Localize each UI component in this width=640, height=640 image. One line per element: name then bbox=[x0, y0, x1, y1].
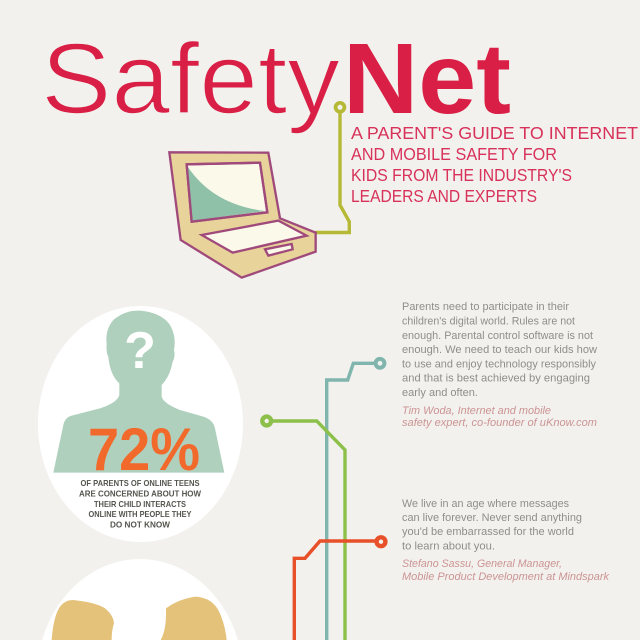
connector: teal line bbox=[327, 359, 384, 640]
panel: 72% statistic bbox=[38, 306, 243, 542]
subtitle bbox=[351, 123, 638, 206]
caption bbox=[79, 478, 201, 530]
title bbox=[41, 23, 511, 135]
text block: Tim Woda quote: Tim Woda, Internet and mobile bbox=[402, 405, 551, 417]
icon: laptop bbox=[169, 152, 316, 278]
text block: Stefano Sassu quote: Mobile Product Development at Mindspark bbox=[402, 571, 609, 583]
caption: ONLINE WITH PEOPLE THEY bbox=[88, 509, 192, 519]
text block: Stefano Sassu quote: to learn about you. bbox=[402, 540, 495, 552]
connector: green line bbox=[262, 417, 345, 640]
caption: THEIR CHILD INTERACTS bbox=[94, 499, 186, 509]
text block: Tim Woda quote bbox=[402, 301, 597, 429]
text block: Stefano Sassu quote bbox=[402, 498, 609, 583]
icon: silhouette with question mark bbox=[53, 311, 224, 473]
caption: DO NOT KNOW bbox=[110, 520, 170, 530]
caption: ARE CONCERNED ABOUT HOW bbox=[79, 488, 201, 498]
text block: Stefano Sassu quote: Stefano Sassu, General Manager, bbox=[402, 558, 562, 570]
text block: Tim Woda quote: to use and enjoy technology responsibly bbox=[402, 358, 596, 370]
text block: Tim Woda quote: enough. Parental control software is not bbox=[402, 330, 593, 342]
subtitle: A PARENT'S GUIDE TO INTERNET bbox=[351, 123, 638, 143]
text block: Tim Woda quote: enough. We need to teach our kids how bbox=[402, 344, 597, 356]
statistic: 72%: 72% bbox=[88, 416, 200, 483]
connector: laptop to title bbox=[315, 103, 349, 233]
text block: Tim Woda quote: children's digital world. Rules are not bbox=[402, 316, 575, 328]
text block: Stefano Sassu quote: We live in an age where messages bbox=[402, 498, 569, 510]
panel: second statistic oval bbox=[42, 559, 238, 640]
text block: Stefano Sassu quote: can live forever. Never send anything bbox=[402, 512, 582, 524]
title: Net bbox=[343, 23, 511, 135]
text block: Tim Woda quote: Parents need to participate in their bbox=[402, 301, 569, 313]
subtitle: AND MOBILE SAFETY FOR bbox=[351, 144, 557, 164]
text block: Tim Woda quote: safety expert, co-founder of uKnow.com bbox=[402, 417, 597, 429]
text block: Tim Woda quote: early and often. bbox=[402, 387, 478, 399]
connector: red line bbox=[294, 537, 385, 640]
text block: Stefano Sassu quote: you'd be embarrassed for the world bbox=[402, 526, 574, 538]
text block: Tim Woda quote: and that is best achieved by engaging bbox=[402, 373, 590, 385]
subtitle: KIDS FROM THE INDUSTRY'S bbox=[351, 165, 572, 185]
title: Safety bbox=[41, 23, 340, 135]
caption: OF PARENTS OF ONLINE TEENS bbox=[80, 478, 200, 488]
subtitle: LEADERS AND EXPERTS bbox=[351, 186, 537, 206]
icon: silhouette with question mark: ? bbox=[124, 322, 156, 380]
